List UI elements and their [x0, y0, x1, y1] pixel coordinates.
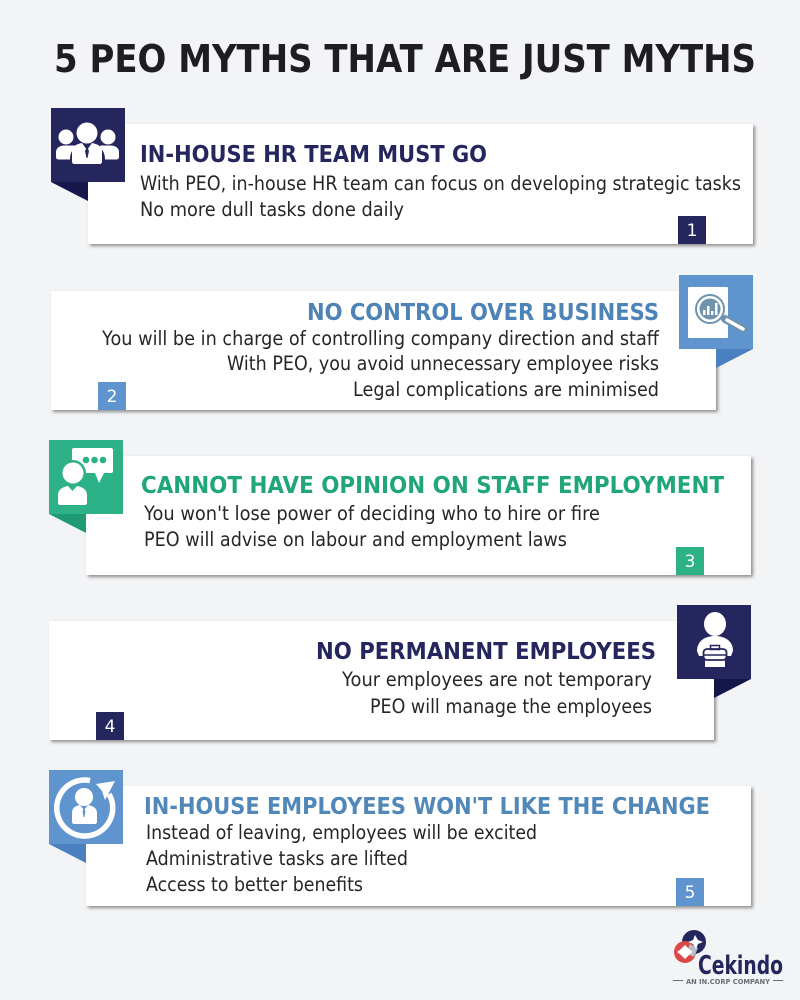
logo tagline: AN IN.CORP COMPANY — [686, 978, 771, 986]
logo: Cekindo — [673, 930, 783, 986]
body text 4: PEO will manage the employees — [370, 695, 652, 718]
number badge 1 — [678, 216, 706, 244]
icon: employee with briefcase — [677, 605, 751, 679]
panel: myth 5 — [49, 770, 751, 906]
card 5 — [86, 786, 751, 906]
panel: myth 2 — [51, 275, 753, 410]
number badge 5 — [676, 878, 704, 906]
panel: myth 4 — [49, 605, 751, 740]
card 3 — [86, 456, 751, 575]
heading 4: NO PERMANENT EMPLOYEES — [316, 639, 656, 665]
ribbon fold 3 — [49, 514, 86, 533]
body text 1: No more dull tasks done daily — [140, 198, 404, 221]
body text 2 — [101, 327, 660, 401]
card 2 — [51, 291, 716, 410]
body text 5: Administrative tasks are lifted — [146, 847, 408, 870]
logo mark — [674, 930, 706, 963]
number badge 2: 2 — [107, 387, 117, 407]
ribbon fold 4 — [714, 679, 751, 698]
body text 5 — [146, 821, 537, 896]
number badge 2 — [98, 382, 126, 410]
card 4 — [49, 621, 714, 740]
body text 3: PEO will advise on labour and employment laws — [144, 528, 567, 551]
panel: myth 1 — [51, 108, 753, 244]
number badge 3: 3 — [685, 552, 695, 572]
number badge 3 — [676, 547, 704, 575]
body text 1: With PEO, in-house HR team can focus on developing strategic tasks — [140, 172, 741, 195]
card 1 — [88, 124, 753, 244]
number badge 5: 5 — [685, 883, 695, 903]
icon: person with speech bubble — [49, 440, 123, 514]
icon: person inside circular arrow — [49, 770, 123, 844]
number badge 1: 1 — [687, 221, 697, 241]
body text 2: Legal complications are minimised — [353, 378, 659, 401]
ribbon fold 5 — [49, 844, 86, 863]
heading 2: NO CONTROL OVER BUSINESS — [307, 300, 659, 326]
body text 4 — [341, 668, 652, 718]
body text 1 — [140, 172, 741, 221]
body text 2: With PEO, you avoid unnecessary employee risks — [227, 352, 659, 375]
body text 4: Your employees are not temporary — [341, 668, 652, 691]
body text 3 — [143, 502, 600, 551]
body text 5: Instead of leaving, employees will be excited — [146, 821, 537, 844]
ribbon fold 2 — [716, 349, 753, 368]
ribbon fold 1 — [51, 182, 88, 201]
body text 3: You won't lose power of deciding who to hire or fire — [143, 502, 600, 525]
icon: team of three people — [51, 108, 125, 182]
panel: myth 3 — [49, 440, 751, 575]
heading 3: CANNOT HAVE OPINION ON STAFF EMPLOYMENT — [141, 473, 724, 499]
icon: magnifier over report — [679, 275, 753, 349]
heading 5: IN-HOUSE EMPLOYEES WON'T LIKE THE CHANGE — [144, 794, 710, 820]
body text 5: Access to better benefits — [146, 873, 363, 896]
number badge 4: 4 — [105, 717, 115, 737]
body text 2: You will be in charge of controlling company direction and staff — [101, 327, 660, 350]
number badge 4 — [96, 712, 124, 740]
heading 1: IN-HOUSE HR TEAM MUST GO — [140, 142, 487, 168]
